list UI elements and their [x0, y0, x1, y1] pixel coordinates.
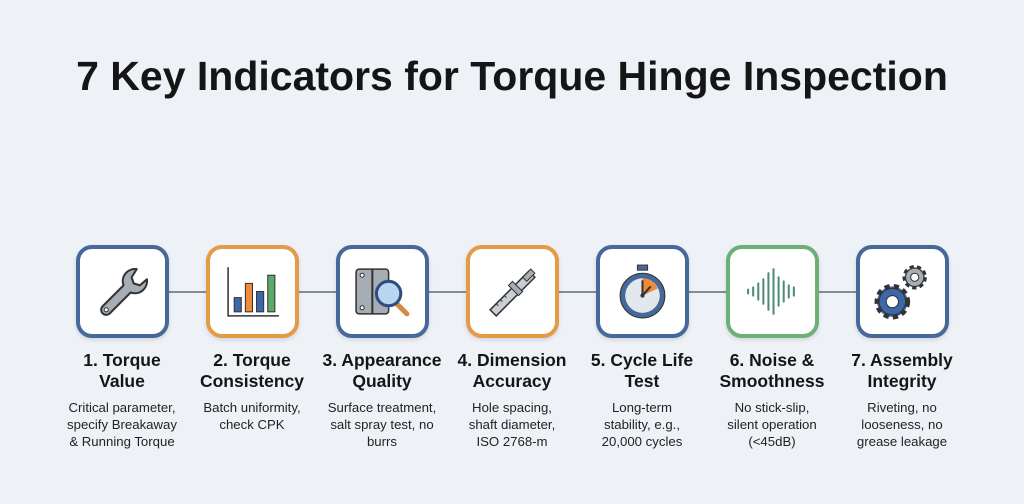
heading [200, 350, 304, 391]
step 5 [591, 245, 693, 449]
description: grease leakage [857, 434, 947, 449]
description: salt spray test, no [330, 417, 434, 432]
icon: sound wave [726, 245, 819, 338]
step 6 [719, 245, 825, 449]
step 1 [67, 245, 177, 449]
heading: Smoothness [719, 371, 825, 391]
description [67, 400, 177, 449]
description: check CPK [219, 417, 285, 432]
heading: Accuracy [473, 371, 551, 391]
step 3 [322, 245, 442, 449]
heading: 4. Dimension [458, 350, 566, 370]
icon: gears [856, 245, 949, 338]
heading: 2. Torque [213, 350, 291, 370]
description: Riveting, no [867, 400, 937, 415]
description: shaft diameter, [469, 417, 555, 432]
description [469, 400, 555, 449]
heading: Test [625, 371, 659, 391]
heading [851, 350, 953, 391]
description [602, 400, 682, 449]
description [727, 400, 817, 449]
heading: Consistency [200, 371, 304, 391]
description: burrs [367, 434, 397, 449]
title: 7 Key Indicators for Torque Hinge Inspection [76, 53, 948, 99]
description: Hole spacing, [472, 400, 552, 415]
heading: 6. Noise & [730, 350, 814, 370]
description [328, 400, 436, 449]
step 7 [851, 245, 953, 449]
heading: 7. Assembly [851, 350, 953, 370]
connector line [120, 291, 904, 293]
heading [719, 350, 825, 391]
description: (<45dB) [748, 434, 796, 449]
step 2 [200, 245, 304, 432]
description: ISO 2768-m [476, 434, 548, 449]
heading [83, 350, 161, 391]
description: silent operation [727, 417, 817, 432]
step 4 [458, 245, 566, 449]
description: Critical parameter, [68, 400, 176, 415]
heading: Integrity [867, 371, 937, 391]
icon: bar chart [206, 245, 299, 338]
description: looseness, no [861, 417, 943, 432]
heading [322, 350, 442, 391]
heading [591, 350, 693, 391]
description: Batch uniformity, [203, 400, 301, 415]
description: & Running Torque [69, 434, 175, 449]
description: stability, e.g., [604, 417, 680, 432]
icon: wrench [76, 245, 169, 338]
description [203, 400, 301, 432]
description: Surface treatment, [328, 400, 436, 415]
description: specify Breakaway [67, 417, 177, 432]
description: Long-term [612, 400, 672, 415]
description [857, 400, 947, 449]
heading: Value [99, 371, 145, 391]
heading: 3. Appearance [322, 350, 442, 370]
icon: stopwatch [596, 245, 689, 338]
heading: Quality [352, 371, 412, 391]
icon: hinge with magnifier [336, 245, 429, 338]
description: 20,000 cycles [602, 434, 682, 449]
icon: caliper [466, 245, 559, 338]
heading [458, 350, 566, 391]
heading: 5. Cycle Life [591, 350, 693, 370]
heading: 1. Torque [83, 350, 161, 370]
description: No stick-slip, [735, 400, 809, 415]
